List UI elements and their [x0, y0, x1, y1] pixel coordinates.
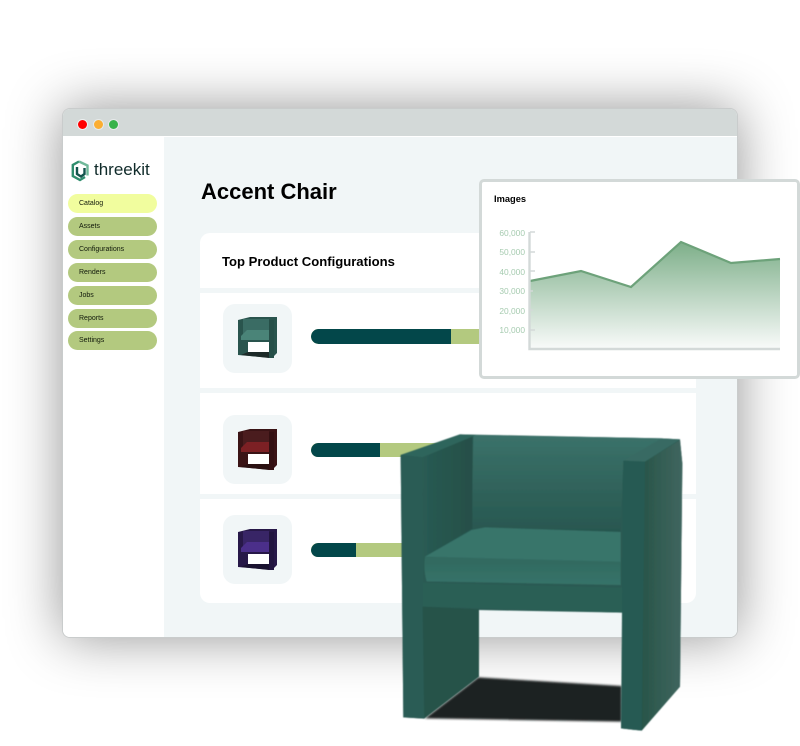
bar 3 [311, 543, 551, 557]
seat rail [423, 583, 623, 613]
accent chair [400, 434, 684, 732]
nav: Reports: Reports [79, 315, 104, 322]
nav: Settings: Settings [79, 337, 104, 344]
right arm outer side [642, 440, 682, 731]
nav: Renders: Renders [79, 269, 105, 276]
thumbnail: purple chair [223, 515, 292, 584]
nav: Jobs: Jobs [79, 292, 94, 299]
icon: red chair [238, 429, 277, 470]
floor shadow [425, 677, 622, 722]
bar 2 [311, 443, 551, 457]
right arm top [623, 438, 680, 462]
title bar [63, 109, 739, 136]
chart card: images [479, 179, 800, 379]
nav: Configurations [68, 240, 157, 259]
y-axis labels [499, 228, 525, 335]
nav: Jobs [68, 286, 157, 305]
right arm front [621, 461, 645, 731]
panel heading: Top Product Configurations [222, 254, 395, 269]
seat cushion top [425, 527, 621, 563]
nav: Configurations: Configurations [79, 246, 124, 253]
window control: orange [94, 120, 103, 129]
area chart [528, 231, 780, 350]
nav: Reports [68, 309, 157, 328]
label 60,000: 60,000 [499, 228, 525, 238]
browser window [62, 108, 738, 638]
nav: Assets [68, 217, 157, 236]
icon: purple chair [238, 529, 277, 570]
panel header: top product configurations [200, 233, 696, 288]
nav: Catalog [68, 194, 157, 213]
page heading: Accent Chair [201, 179, 337, 204]
left leg side [423, 607, 479, 719]
chair silhouette [401, 434, 682, 731]
row 1: green chair [200, 293, 696, 388]
bar 1 [311, 329, 511, 344]
window control: red [78, 120, 87, 129]
icon: green chair [238, 317, 277, 358]
label 50,000: 50,000 [499, 247, 525, 257]
logo wordmark: threekit [94, 160, 150, 179]
chair back [472, 435, 662, 532]
row 2: red chair [200, 393, 696, 494]
thumbnail: red chair [223, 415, 292, 484]
nav: Settings [68, 331, 157, 350]
label 20,000: 20,000 [499, 306, 525, 316]
chair body [401, 434, 682, 731]
window control: green [109, 120, 118, 129]
left arm inner side [422, 437, 472, 607]
label 10,000: 10,000 [499, 325, 525, 335]
row 3: purple chair [200, 499, 696, 603]
seat cushion front [424, 557, 621, 585]
nav: Catalog: Catalog [79, 200, 103, 207]
chart title: Images [494, 194, 526, 204]
logo icon [72, 160, 89, 182]
label 30,000: 30,000 [499, 286, 525, 296]
nav: Assets: Assets [79, 223, 100, 230]
left arm top [401, 434, 476, 457]
sidebar [63, 136, 164, 639]
main content background [164, 137, 739, 639]
label 40,000: 40,000 [499, 267, 525, 277]
nav: Renders [68, 263, 157, 282]
thumbnail: green chair [223, 304, 292, 373]
left arm front [401, 455, 424, 719]
